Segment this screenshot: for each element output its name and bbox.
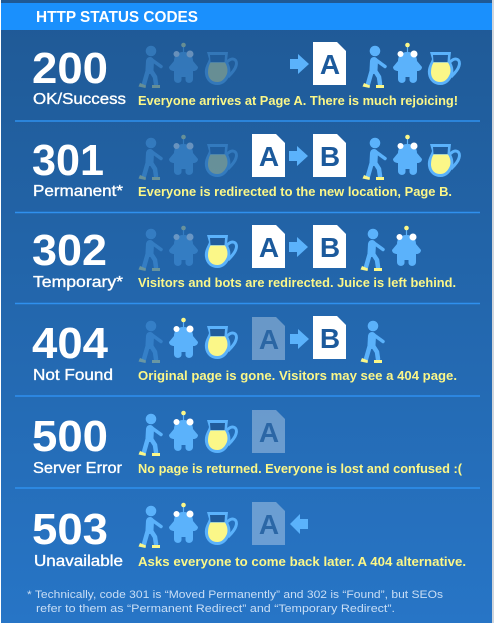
page A: A: [259, 141, 279, 172]
juice jug: [205, 235, 236, 268]
description: Original page is gone. Visitors may see a 404 page.: [138, 369, 457, 383]
footnote: refer to them as “Permanent Redirect” and “Temporary Redirect”.: [36, 603, 395, 615]
robot and jug: [169, 318, 236, 359]
footnote: [27, 589, 444, 615]
person: [360, 321, 383, 363]
row: 302: [32, 225, 456, 291]
status code 301: 301: [32, 136, 104, 185]
active icons: [362, 43, 459, 88]
status code 500: 500: [32, 412, 108, 461]
arrow: [290, 54, 309, 74]
page A: [313, 42, 346, 85]
faded page A: A: [259, 324, 279, 355]
page B: [313, 316, 346, 359]
page B: [313, 134, 346, 177]
faded page A: A: [259, 509, 279, 540]
faded person: [138, 321, 161, 363]
header bar: [1, 3, 492, 30]
label: Server Error: [33, 460, 122, 477]
footnote: * Technically, code 301 is “Moved Permanently” and 302 is “Found”, but SEOs: [27, 589, 444, 601]
label: OK/Success: [33, 91, 126, 108]
faded page A: [252, 317, 285, 360]
label: Temporary*: [33, 274, 123, 291]
page B: [313, 225, 346, 268]
faded page A: A: [259, 417, 279, 448]
page B: B: [320, 141, 340, 172]
status code 200: 200: [32, 44, 108, 93]
status code 503: 503: [32, 505, 108, 554]
row: 200: [32, 42, 459, 108]
arrow: [289, 146, 308, 166]
row: 301: [32, 134, 459, 200]
page A: A: [320, 49, 340, 80]
faded icons: [138, 43, 236, 88]
faded icons: [138, 226, 198, 271]
description: Everyone arrives at Page A. There is much rejoicing!: [138, 94, 458, 108]
active icons: [362, 135, 459, 180]
description: Visitors and bots are redirected. Juice is left behind.: [138, 276, 456, 290]
description: Everyone is redirected to the new location, Page B.: [138, 185, 452, 199]
title: HTTP STATUS CODES: [36, 9, 198, 26]
page B: B: [320, 232, 340, 263]
faded page A: [252, 502, 285, 545]
page A: [252, 134, 285, 177]
arrow: [290, 329, 309, 349]
page A: [252, 225, 285, 268]
faded icons: [138, 135, 236, 180]
status code 302: 302: [32, 226, 107, 275]
icons: [138, 503, 236, 548]
left arrow: [290, 514, 308, 534]
faded page A: [252, 410, 285, 453]
arrow: [289, 237, 308, 257]
row: 500: [32, 410, 463, 477]
description: Asks everyone to come back later. A 404 alternative.: [138, 555, 466, 569]
label: Permanent*: [33, 183, 123, 200]
row: 404: [32, 316, 457, 384]
label: Not Found: [33, 367, 113, 384]
label: Unavailable: [34, 553, 123, 570]
page A: A: [259, 232, 279, 263]
description: No page is returned. Everyone is lost and confused :(: [138, 462, 463, 476]
icons: [138, 411, 236, 456]
page B: B: [320, 323, 340, 354]
active icons: [360, 226, 421, 271]
row: 503: [32, 502, 466, 570]
status code 404: 404: [32, 319, 109, 368]
